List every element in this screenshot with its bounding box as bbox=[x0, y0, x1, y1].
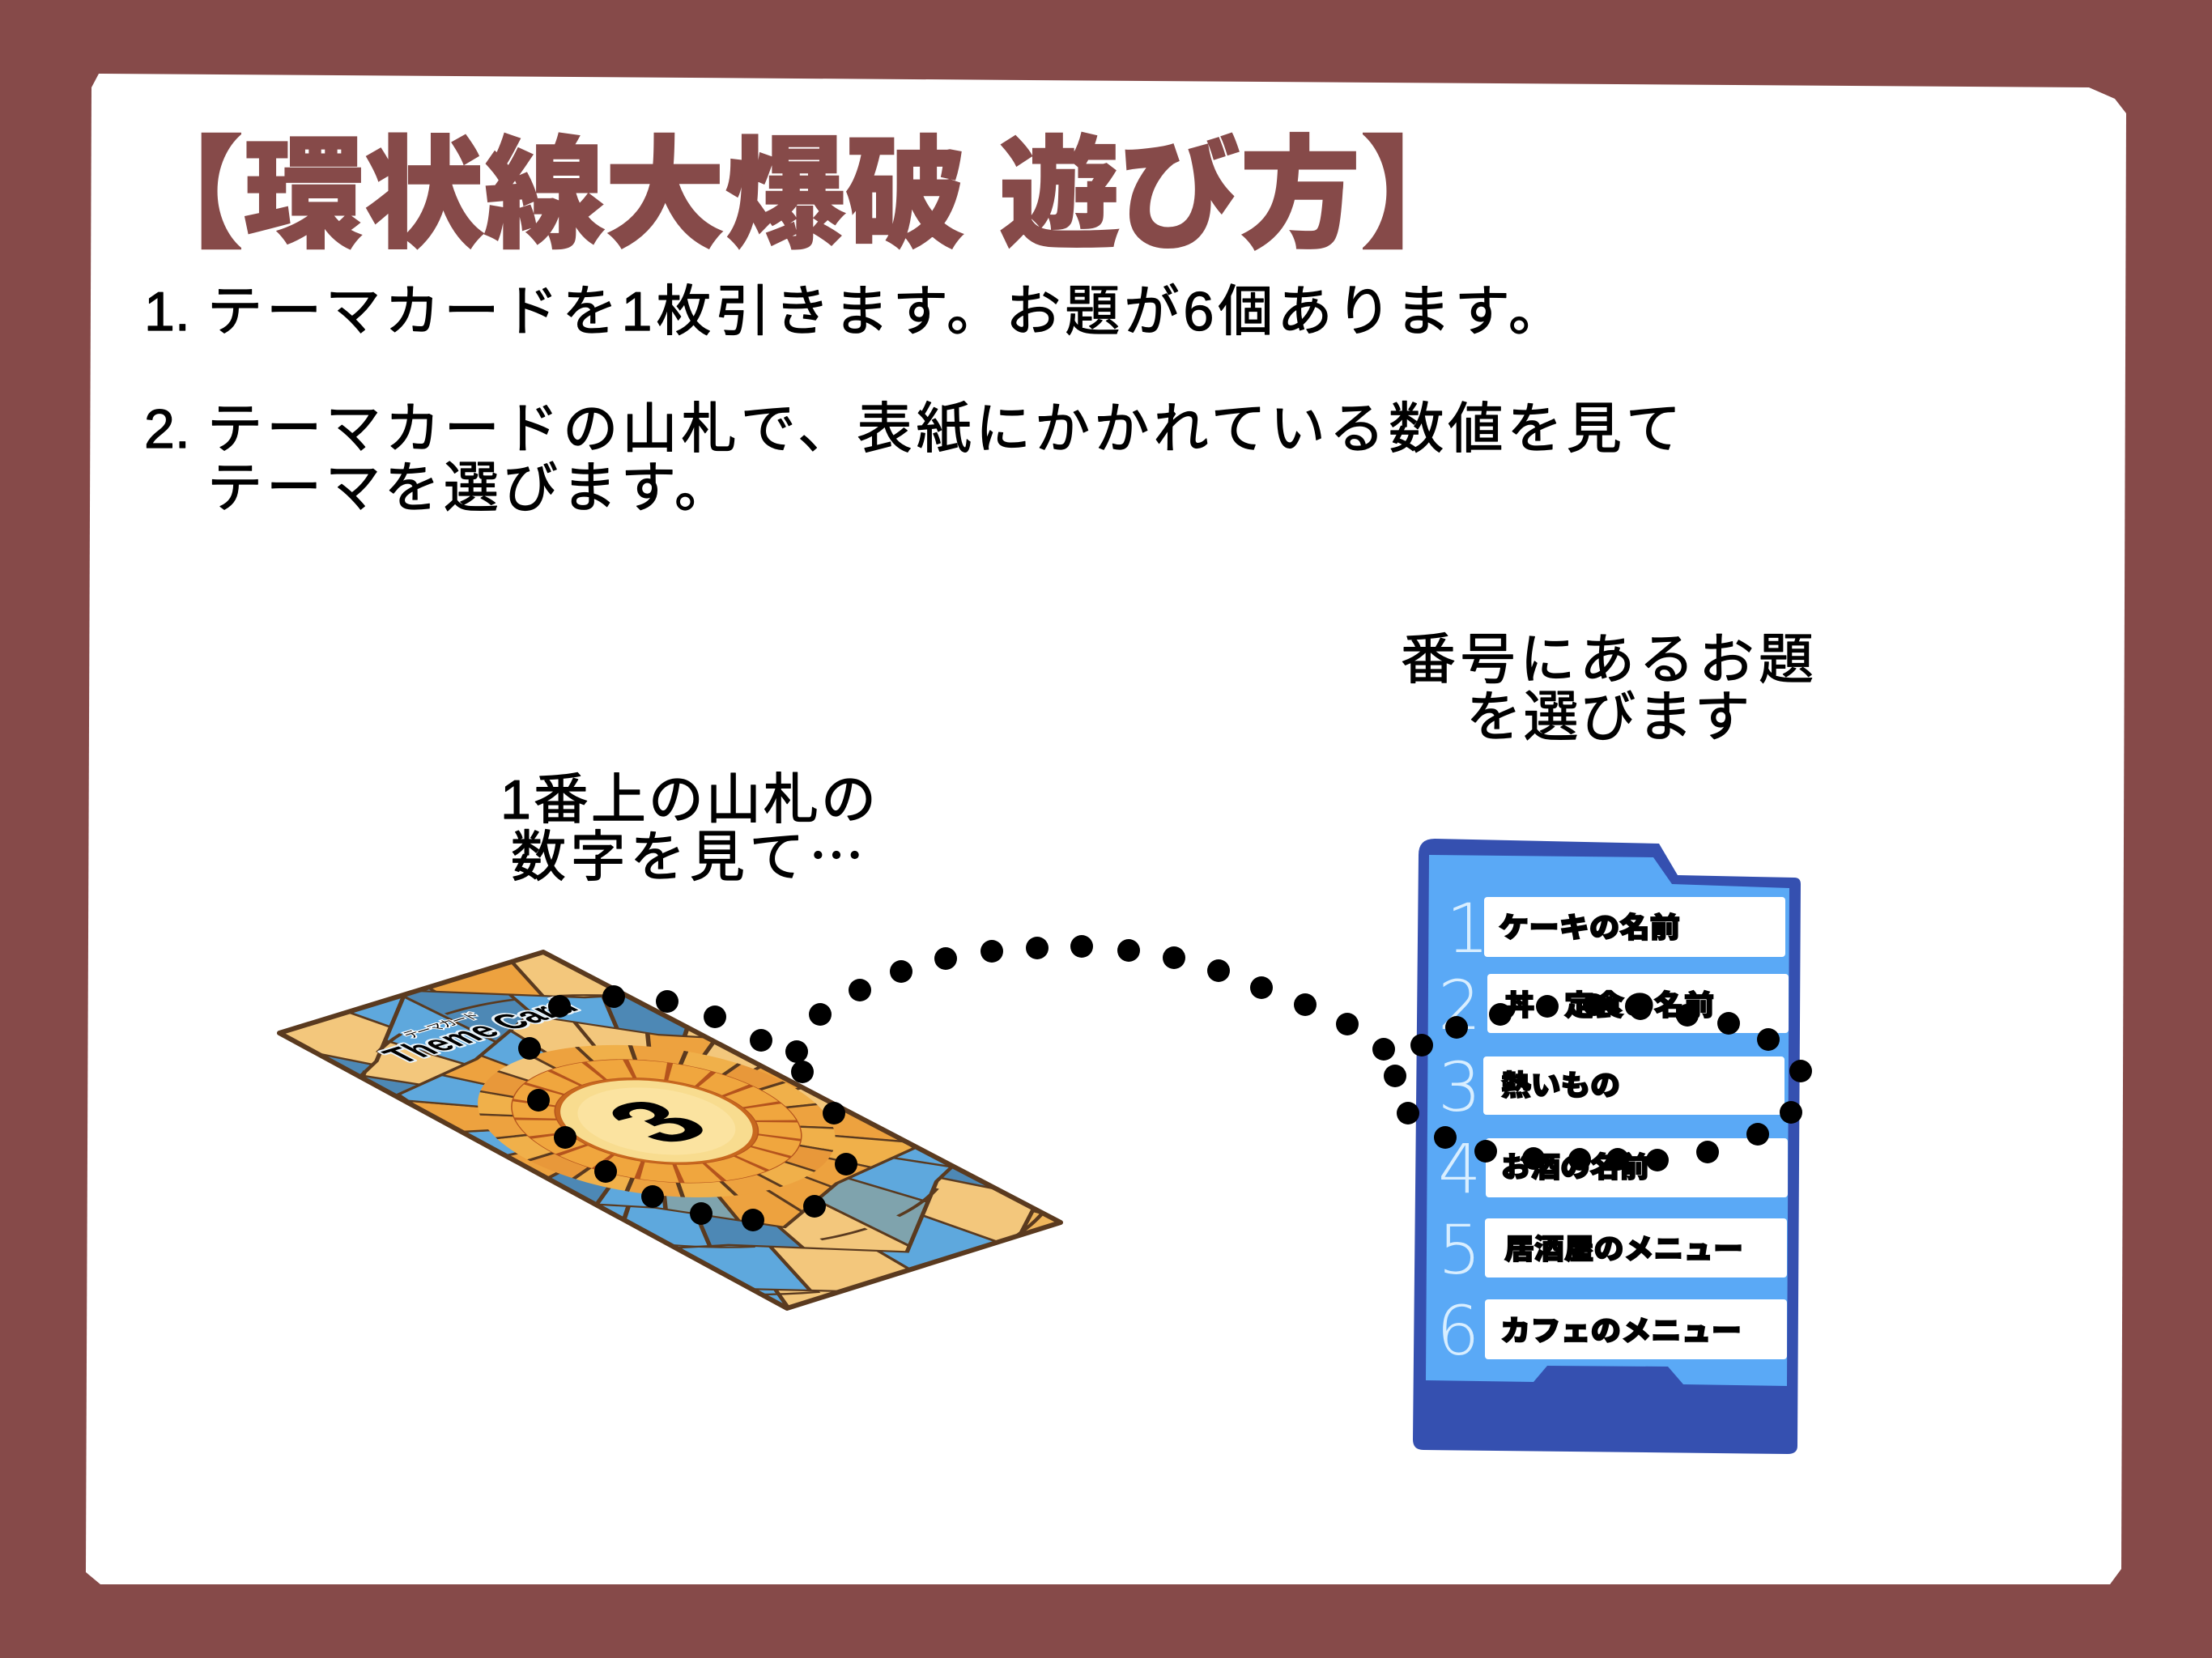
row 3 bbox=[1438, 1048, 1784, 1127]
stained glass artwork bbox=[285, 954, 1054, 1306]
row 5 bbox=[1438, 1210, 1787, 1290]
row 1 bbox=[1446, 889, 1785, 968]
step 2 text: 2. bbox=[144, 398, 190, 460]
row 6: 6 bbox=[1436, 1291, 1479, 1371]
row 3: 熱いもの bbox=[1501, 1070, 1620, 1102]
step 2 text: テーマを選びます。 bbox=[207, 457, 730, 519]
card lettering bbox=[364, 988, 797, 1176]
row 6: カフェのメニュー bbox=[1500, 1316, 1742, 1347]
theme list folder bbox=[1413, 839, 1801, 1454]
folder outer shell bbox=[1413, 839, 1801, 1454]
caption: deck number bbox=[500, 769, 876, 892]
caption: deck number: 1番上の山札の bbox=[500, 769, 876, 831]
row 6 bbox=[1436, 1291, 1787, 1371]
row 4: お酒の名前 bbox=[1501, 1152, 1649, 1184]
theme card deck bbox=[277, 950, 1063, 1311]
card title: Theme Card bbox=[374, 994, 588, 1068]
row 4: 4 bbox=[1438, 1129, 1481, 1209]
row 5: 居酒屋のメニュー bbox=[1504, 1234, 1743, 1265]
caption: choose topic bbox=[1401, 629, 1814, 748]
row 2: 丼・定食の名前 bbox=[1504, 990, 1714, 1022]
step 1 text: 1. bbox=[144, 281, 190, 342]
row 1: ケーキの名前 bbox=[1499, 912, 1680, 944]
dotted arrow path bbox=[518, 935, 1812, 1231]
row 1: 1 bbox=[1446, 889, 1489, 968]
caption: choose topic: 番号にあるお題 bbox=[1401, 629, 1814, 691]
card title: テーマカード bbox=[398, 1010, 485, 1040]
step 2 text bbox=[144, 398, 1681, 519]
card border bbox=[279, 952, 1061, 1308]
row 2: 2 bbox=[1438, 966, 1481, 1045]
card number: 3 bbox=[579, 1086, 736, 1157]
folder inner sheet bbox=[1426, 855, 1789, 1386]
row 2 bbox=[1438, 966, 1789, 1045]
row 3: 3 bbox=[1438, 1048, 1481, 1127]
row 5: 5 bbox=[1438, 1210, 1481, 1290]
title: 【環状線大爆破 遊び方】 bbox=[123, 127, 1481, 263]
step 2 text: テーマカードの山札で、表紙にかかれている数値を見て bbox=[207, 398, 1681, 460]
caption: choose topic: を選びます bbox=[1466, 687, 1750, 748]
step 1 text: テーマカードを1枚引きます。お題が6個あります。 bbox=[207, 281, 1563, 342]
caption: deck number: 数字を見て… bbox=[511, 812, 864, 892]
row 4 bbox=[1438, 1129, 1788, 1209]
